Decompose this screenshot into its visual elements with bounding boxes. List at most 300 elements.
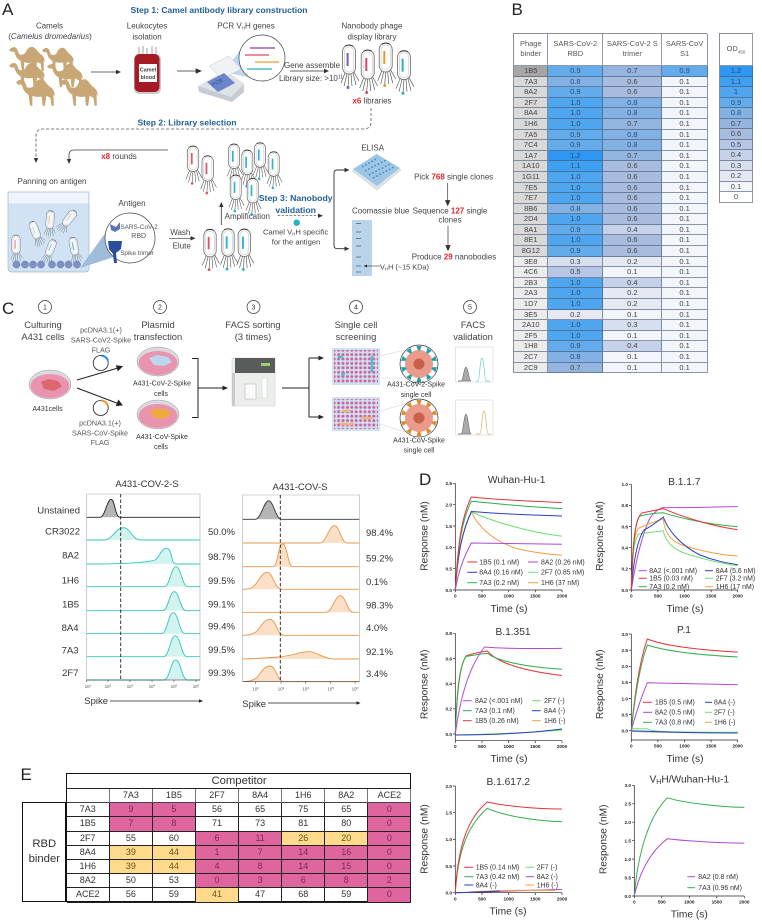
axes: 0.5	[445, 566, 452, 572]
axes	[621, 632, 743, 748]
legend: 1B5 (0.14 nM)	[476, 865, 519, 872]
x axis: 10	[171, 684, 176, 689]
step 4 title: screening	[336, 331, 376, 342]
y axis label: Response (nM)	[598, 804, 610, 874]
panel B: phage binder ELISA heatmap table: 7C4	[524, 140, 538, 149]
panel B: phage binder ELISA heatmap table: 3E5	[524, 310, 537, 319]
panel letter C: C	[2, 299, 14, 318]
step 5 title: FACS	[461, 319, 485, 330]
step numbers: 4	[354, 304, 358, 312]
panel B: phage binder ELISA heatmap table: 0.1	[679, 77, 690, 86]
panel E: competition binding table: 71	[212, 818, 222, 828]
axes	[445, 481, 568, 598]
panel B: phage binder ELISA heatmap table: 0.9	[570, 87, 581, 96]
panel E: competition table, row header: binder	[29, 853, 60, 865]
OD450 colour scale legend: 1.1	[731, 77, 741, 86]
axes: 0.0	[445, 588, 452, 593]
panel B: phage binder ELISA heatmap table: 8E1	[524, 235, 537, 244]
amplification label: Amplification	[225, 212, 270, 221]
panel E: competition binding table: 73	[255, 818, 265, 828]
axes: 0	[454, 896, 457, 902]
axes: 2000	[557, 594, 568, 598]
panel E: competition binding table: 0	[214, 875, 220, 885]
step 2 heading: Step 2: Library selection	[138, 118, 236, 128]
icon: PCR machine with gene lens: PCR	[211, 78, 224, 88]
OD450 colour scale legend: 0.2	[731, 171, 741, 180]
positive percentages	[366, 528, 393, 680]
histogram traces	[87, 499, 200, 680]
panel B: phage binder ELISA heatmap table: 1B5	[524, 66, 537, 75]
step 1 heading: Step 1: Camel antibody library construction	[130, 5, 308, 15]
chart: A431-COV-S flow histograms	[242, 482, 393, 710]
gene assemble label and arrow: Library size: >10	[279, 74, 338, 83]
axes: 1500	[706, 594, 717, 598]
legend: 2F7 (-)	[544, 698, 565, 705]
panel E: competition binding table: 44	[169, 861, 179, 871]
panel B: phage binder ELISA heatmap table: 2F5	[524, 331, 537, 340]
legend: 7A3 (0.2 nM)	[479, 580, 519, 587]
OD450 colour scale legend: 0.9	[731, 98, 741, 107]
panel E: competition binding table: 75	[298, 804, 308, 814]
panel E: competition binding table: 8	[344, 875, 349, 885]
chart title: A431-COV-S	[273, 482, 327, 493]
icon: plasmid top	[93, 356, 108, 370]
x axis: 10	[85, 684, 90, 689]
panel E: competition binding table: 47	[255, 889, 265, 899]
panel E: competition binding table: 2F7	[80, 833, 95, 843]
icon: camel blood bag: Camel	[140, 68, 156, 74]
x axis: 4	[154, 684, 156, 688]
axes: 0.6	[621, 524, 628, 529]
axes: 500	[478, 594, 486, 598]
panel B: phage binder ELISA heatmap table: 0.6	[627, 193, 638, 202]
panel E: competition binding table: 53	[169, 875, 179, 885]
axes: 0.5	[445, 864, 452, 869]
panel B: phage binder ELISA heatmap table: 2C9	[524, 363, 538, 372]
axes: 1.0	[621, 482, 628, 487]
axes	[621, 482, 743, 598]
panel B: phage binder ELISA heatmap table: 0.6	[627, 87, 638, 96]
chart title: A431-COV-2-S	[115, 479, 179, 490]
panel B: phage binder ELISA heatmap table: 0.1	[679, 341, 690, 350]
ELISA label: ELISA	[361, 144, 385, 153]
legend: 1B5 (0.1 nM)	[479, 559, 519, 566]
legend: 2F7 (3.2 nM)	[716, 576, 755, 583]
panel B: phage binder ELISA heatmap table: S1	[680, 49, 689, 58]
leukocytes label: isolation	[132, 32, 162, 41]
legend: 1H6 (-)	[544, 718, 565, 725]
plot frame	[87, 494, 200, 680]
panel B: phage binder ELISA heatmap table: 8G12	[522, 246, 540, 255]
panel B: phage binder ELISA heatmap table: 0.8	[627, 108, 638, 117]
panel B: phage binder ELISA heatmap table: 0.8	[627, 140, 638, 149]
x axis: 2	[257, 686, 259, 690]
panel B: phage binder ELISA heatmap table: 1.0	[570, 214, 581, 223]
sequence text: Sequence 127 single	[413, 206, 487, 215]
panel B: phage binder ELISA heatmap table: RBD	[567, 49, 583, 58]
axes: 3.0	[621, 632, 628, 637]
PCR label: H genes	[245, 22, 275, 31]
panel B: phage binder ELISA heatmap table: 8A1	[524, 225, 537, 234]
spike axis label: Spike	[242, 699, 266, 710]
positive percentages: 50.0%	[208, 527, 235, 538]
panel B: phage binder ELISA heatmap table: 4C6	[524, 267, 538, 276]
panel B: phage binder ELISA heatmap table: 0.1	[679, 161, 690, 170]
panel B: phage binder ELISA heatmap table: 0.4	[627, 225, 638, 234]
axes: 0	[454, 744, 457, 749]
panel E: competition binding table: 0	[387, 833, 392, 843]
panel B: phage binder ELISA heatmap table: 1.0	[570, 172, 581, 181]
axes: 0	[633, 900, 636, 904]
panel B: phage binder ELISA heatmap table: 0.6	[627, 172, 638, 181]
axes: 2000	[739, 900, 750, 904]
y axis label: Response (nM)	[420, 804, 430, 874]
icon: transfected dish CoV-2	[137, 347, 179, 376]
sensorgram curves	[455, 647, 562, 735]
clone pick text: Pick 768 single clones	[414, 172, 493, 181]
icon: eluted phages	[202, 229, 254, 271]
panel B: phage binder ELISA heatmap table: 1A7	[524, 151, 537, 160]
chart: VHH/Wuhan-Hu-1 binding kinetics	[598, 774, 750, 920]
panel B: phage binder ELISA heatmap table: 8A2	[524, 87, 537, 96]
icon: PCR machine with gene lens	[198, 35, 285, 102]
OD450 colour scale legend: 1	[734, 87, 738, 96]
panel B: phage binder ELISA heatmap table: 1.1	[570, 161, 581, 170]
mini FACS plot CoV-2	[456, 347, 493, 382]
step 3 heading: Step 3: Nanobody	[259, 193, 333, 203]
panel E: competition binding table: 7	[128, 818, 133, 828]
axes: 1.0	[621, 696, 628, 701]
legend: 1B5 (0.5 nM)	[655, 700, 695, 707]
axes: 0	[454, 594, 457, 598]
panel E: competition binding table: 5	[171, 804, 176, 814]
panel E: competition binding table: 9	[128, 804, 133, 814]
panel B: phage binder ELISA heatmap table: 0.6	[627, 161, 638, 170]
x axis: 10	[193, 684, 198, 689]
icon: camel herd	[9, 47, 98, 106]
x axis: 3	[283, 686, 285, 690]
axes: 1.0	[445, 837, 452, 842]
panel B: phage binder ELISA heatmap table: 0.1	[679, 98, 690, 107]
plasmid construct text, top: FLAG	[92, 345, 111, 354]
panel B: phage binder ELISA heatmap table: 1.0	[570, 98, 581, 107]
panel E: competition binding table: 50	[126, 875, 136, 885]
plot frame	[243, 495, 359, 682]
x axis: 6	[198, 684, 200, 688]
panel B: phage binder ELISA heatmap table: 0.6	[627, 246, 638, 255]
panel E: competition binding table: 59	[169, 889, 179, 899]
panel B: phage binder ELISA heatmap table: 0.8	[627, 98, 638, 107]
panel B: phage binder ELISA heatmap table: 0.6	[627, 214, 638, 223]
x axis: 4	[307, 686, 309, 690]
panel E: competition binding table: 59	[341, 889, 351, 899]
panel E: competition binding table: 80	[341, 818, 351, 828]
chart title: V	[649, 774, 656, 786]
panel B: phage binder ELISA heatmap table: 0.1	[679, 267, 690, 276]
OD450 colour scale legend: 0.4	[731, 150, 741, 159]
legend: 7A3 (0.8 nM)	[655, 720, 695, 727]
panel B: phage binder ELISA heatmap table: 0.8	[570, 77, 581, 86]
icon: gel with band: V	[380, 262, 385, 271]
OD450 colour scale legend: OD450	[727, 44, 745, 55]
legend: 8A2 (0.8 nM)	[698, 874, 738, 881]
positive percentages: 99.5%	[208, 576, 235, 587]
OD450 colour scale legend: 0.1	[731, 182, 741, 191]
dashed arrow with VHH marker: for the antigen	[272, 237, 320, 246]
icon: camel blood bag: blood	[141, 75, 155, 81]
binder labels: 1B5	[62, 600, 79, 610]
panel E: competition binding table: 1B5	[166, 790, 182, 800]
step numbers: 1	[43, 304, 47, 312]
axes	[445, 631, 568, 749]
axes: 2000	[557, 896, 568, 902]
legend: 8A4 (-)	[544, 708, 565, 715]
y axis label: Response (nM)	[595, 501, 606, 571]
panel E: competition binding table: 0	[387, 861, 392, 871]
panel E: competition binding table: 16	[341, 847, 351, 857]
legend: 1B5 (0.03 nM)	[649, 576, 693, 583]
plasmid construct text, top: pcDNA3.1(+)	[80, 326, 122, 335]
icon: FACS sorter	[232, 358, 275, 406]
panel E: competition binding table: 8A2	[80, 875, 96, 885]
panel E: competition binding table: 65	[341, 804, 351, 814]
panel E: competition binding table: 81	[298, 818, 308, 828]
x axis label: Time (s)	[490, 906, 526, 918]
positive percentages	[208, 527, 235, 679]
arrow: camels to blood	[91, 71, 118, 73]
OD450 colour scale legend	[719, 33, 753, 203]
nanobody library label: display library	[348, 32, 396, 42]
panel E: competition table, row header: RBD	[32, 838, 56, 850]
axes	[445, 784, 568, 902]
x axis: 10	[127, 684, 132, 689]
y axis label: Response (nM)	[595, 649, 606, 719]
antigen lens: RBD	[131, 233, 146, 240]
panel B: phage binder ELISA heatmap table: trimer	[623, 49, 642, 58]
OD450 colour scale legend: 1.2	[731, 66, 741, 75]
dashed arrow with VHH marker: H	[292, 231, 295, 236]
OD450 colour scale legend: 0.3	[731, 161, 741, 170]
panel E: competition binding table: 41	[212, 889, 222, 899]
camels label: (Camelus dromedarius)	[8, 32, 92, 41]
chart: Wuhan-Hu-1 binding kinetics	[420, 475, 585, 615]
x axis	[85, 680, 200, 689]
panel B: phage binder ELISA heatmap table: 0.8	[570, 204, 581, 213]
x axis: 10	[252, 687, 257, 692]
legend: 7A3 (0.1 nM)	[475, 708, 515, 715]
binder labels: Unstained	[37, 506, 80, 516]
panel B: phage binder ELISA heatmap table: 1G11	[522, 172, 540, 181]
OD450 colour scale legend: 0.6	[731, 129, 741, 138]
arrow: transfection bottom	[77, 388, 122, 406]
axes: 1.0	[624, 857, 631, 862]
axes: 1.5	[624, 838, 631, 844]
panel B: phage binder ELISA heatmap table: 0.1	[679, 140, 690, 149]
single cell CoV-2 label: A431-CoV-2-Spike	[387, 382, 445, 389]
chart: P.1 binding kinetics	[595, 625, 743, 765]
chart title: B.1.1.7	[668, 477, 701, 488]
axes: 2.5	[621, 648, 628, 653]
panel B: phage binder ELISA heatmap table: 0.2	[627, 299, 638, 308]
A431-CoV-2 label: cells	[154, 391, 168, 398]
OD450 colour scale legend: 0	[734, 192, 738, 201]
panel B: phage binder ELISA heatmap table: 0.1	[679, 235, 690, 244]
legend	[687, 874, 742, 892]
panel E: competition binding table: 1H6	[295, 790, 311, 800]
rounds arrow and label: x8 rounds	[101, 152, 137, 161]
x axis: 2	[110, 684, 112, 688]
antigen lens: Spike trimer	[120, 250, 154, 257]
y axis label: Response (nM)	[420, 501, 430, 571]
panel B: phage binder ELISA heatmap table: 0.1	[679, 193, 690, 202]
axes: 0.0	[621, 728, 628, 734]
nanobody library label: Nanobody phage	[342, 22, 402, 31]
panel B: phage binder ELISA heatmap table: SARS-CoV-2	[553, 39, 597, 48]
panel E: competition binding table: 8	[258, 861, 263, 871]
axes: 0.0	[445, 732, 452, 737]
spike axis label: Spike	[84, 696, 108, 707]
panel B: phage binder ELISA heatmap table: 0.9	[570, 225, 581, 234]
axes: 2.5	[445, 481, 452, 486]
binder labels: 8A2	[62, 550, 79, 562]
axes: 0.5	[624, 875, 631, 880]
plasmid construct text, bottom: FLAG	[91, 438, 110, 447]
panel B: phage binder ELISA heatmap table: 0.4	[627, 341, 638, 350]
step 1 title: A431 cells	[21, 331, 65, 342]
panel E: competition binding table: 7	[258, 847, 263, 857]
step 5 title: validation	[453, 331, 493, 342]
panel E: competition binding table: Competitor	[211, 775, 267, 787]
panel E: competition binding table: 8A2	[338, 790, 354, 800]
panel E: competition binding table: 0	[387, 889, 392, 899]
panel B: phage binder ELISA heatmap table: 0.1	[679, 119, 690, 128]
step 3 title: (3 times)	[235, 331, 271, 342]
panel B: phage binder ELISA heatmap table: 0.1	[679, 204, 690, 213]
x axis: 10	[149, 684, 154, 689]
spike axis label	[84, 696, 203, 707]
panel B letter: B	[512, 0, 523, 19]
panel B: phage binder ELISA heatmap table: 0.1	[679, 87, 690, 96]
arrow: pick to sequence	[446, 183, 450, 206]
panel E: competition binding table: 4	[214, 861, 220, 871]
panel B: phage binder ELISA heatmap table: 0.4	[627, 278, 638, 287]
A431-CoV label: A431-CoV-Spike	[136, 434, 188, 441]
x axis: 10	[278, 687, 283, 692]
plasmid construct text, top: SARS-CoV2-Spike	[71, 336, 131, 345]
panel B: phage binder ELISA heatmap table: 0.3	[627, 320, 638, 329]
panel B: phage binder ELISA heatmap table: 1.0	[570, 183, 581, 192]
panel E: competition binding table: 14	[298, 861, 308, 871]
panel B: phage binder ELISA heatmap table: 0.9	[570, 246, 581, 255]
panel B: phage binder ELISA heatmap table: 1H6	[524, 119, 538, 128]
panel B: phage binder ELISA heatmap table: 0.9	[570, 140, 581, 149]
panel B: phage binder ELISA heatmap table: 1.0	[570, 193, 581, 202]
sensorgram curves	[634, 798, 744, 896]
legend	[643, 700, 735, 727]
panel B: phage binder ELISA heatmap table: 0.9	[570, 66, 581, 75]
legend: 8A2 (0.5 nM)	[655, 710, 695, 717]
legend: 1H6 (37 nM)	[541, 580, 579, 587]
axes: 1.5	[621, 680, 628, 685]
x axis label: Time (s)	[671, 910, 708, 920]
panel E: competition binding table: 8	[171, 818, 176, 828]
axes: 2000	[732, 744, 743, 748]
axes: 2000	[557, 744, 568, 749]
axes: 0.8	[621, 503, 628, 508]
plasmid construct text, bottom: SARS-CoV-Spike	[72, 429, 128, 438]
panel E: competition binding table: 7A3	[80, 804, 96, 814]
axes: 1000	[684, 900, 695, 904]
histogram traces	[243, 501, 359, 682]
axes: 2000	[732, 594, 743, 598]
sensorgram curves	[455, 497, 562, 590]
panel E: competition binding table: 55	[126, 833, 136, 843]
panel E: competition binding table: 2	[387, 875, 392, 885]
panel B: phage binder ELISA heatmap table: 0.1	[679, 246, 690, 255]
chart: B.1.617.2 binding kinetics	[420, 777, 568, 918]
panel B: phage binder ELISA heatmap table: 0.1	[627, 310, 638, 319]
panel B: phage binder ELISA heatmap table: 0.1	[679, 225, 690, 234]
chart title: B.1.351	[495, 627, 531, 638]
A431-CoV-2 label: A431-CoV-2-Spike	[133, 381, 191, 388]
panel C: cell line generation workflow	[2, 299, 493, 455]
panel B: phage binder ELISA heatmap table: 0.1	[627, 267, 638, 276]
axes: 500	[658, 900, 666, 904]
icon: single cell CoV-2	[380, 345, 438, 383]
icon: screening plate bottom	[332, 397, 380, 431]
panel B: phage binder ELISA heatmap table: 0.1	[679, 310, 690, 319]
A431-CoV label: cells	[154, 444, 168, 451]
chart title: P.1	[677, 625, 691, 636]
panel E: competition binding table: 68	[298, 889, 308, 899]
panel B: phage binder ELISA heatmap table: 0.9	[679, 66, 690, 75]
panel B: phage binder ELISA heatmap table: SARS-CoV	[666, 39, 703, 48]
positive percentages: 99.1%	[208, 600, 235, 610]
positive percentages: 4.0%	[366, 623, 388, 634]
panel B: phage binder ELISA heatmap table: 0.2	[570, 310, 581, 319]
axes	[624, 783, 750, 904]
x axis: 10	[352, 687, 357, 692]
legend: 7A3 (0.96 nM)	[698, 885, 742, 892]
sequence text: clones	[438, 215, 462, 224]
x axis: 5	[176, 684, 178, 688]
panel B: phage binder ELISA heatmap table: 0.1	[627, 363, 638, 372]
OD450 colour scale legend: 0.5	[731, 140, 741, 149]
PCR label: H	[242, 26, 245, 31]
axes: 1500	[530, 896, 541, 902]
panel E: competition binding table: 3	[258, 875, 263, 885]
panel E: competition binding table: 56	[212, 804, 222, 814]
panel B: phage binder ELISA heatmap table: 0.1	[679, 331, 690, 340]
positive percentages: 98.4%	[366, 528, 393, 539]
axes: 0.4	[445, 682, 452, 686]
chart: A431-COV-2-S flow histograms	[37, 479, 235, 707]
x axis: 3	[132, 684, 134, 688]
panel B: phage binder ELISA heatmap table: 0.7	[627, 66, 638, 75]
step numbers: 3	[252, 304, 256, 312]
single cell CoV label: A431-CoV-Spike	[393, 438, 445, 445]
wash and elute step	[169, 228, 196, 250]
icon: camel blood bag	[134, 46, 161, 94]
chart: B.1.1.7 binding kinetics	[595, 477, 756, 615]
positive percentages: 98.3%	[366, 600, 393, 612]
single cell CoV label: single cell	[404, 448, 435, 455]
rounds arrow and label	[67, 150, 168, 164]
legend: 1H6 (-)	[714, 720, 735, 727]
panel E: competition binding table: 1B5	[80, 818, 96, 828]
antigen lens	[80, 213, 158, 268]
antigen lens: SARS-CoV-2	[120, 224, 158, 231]
